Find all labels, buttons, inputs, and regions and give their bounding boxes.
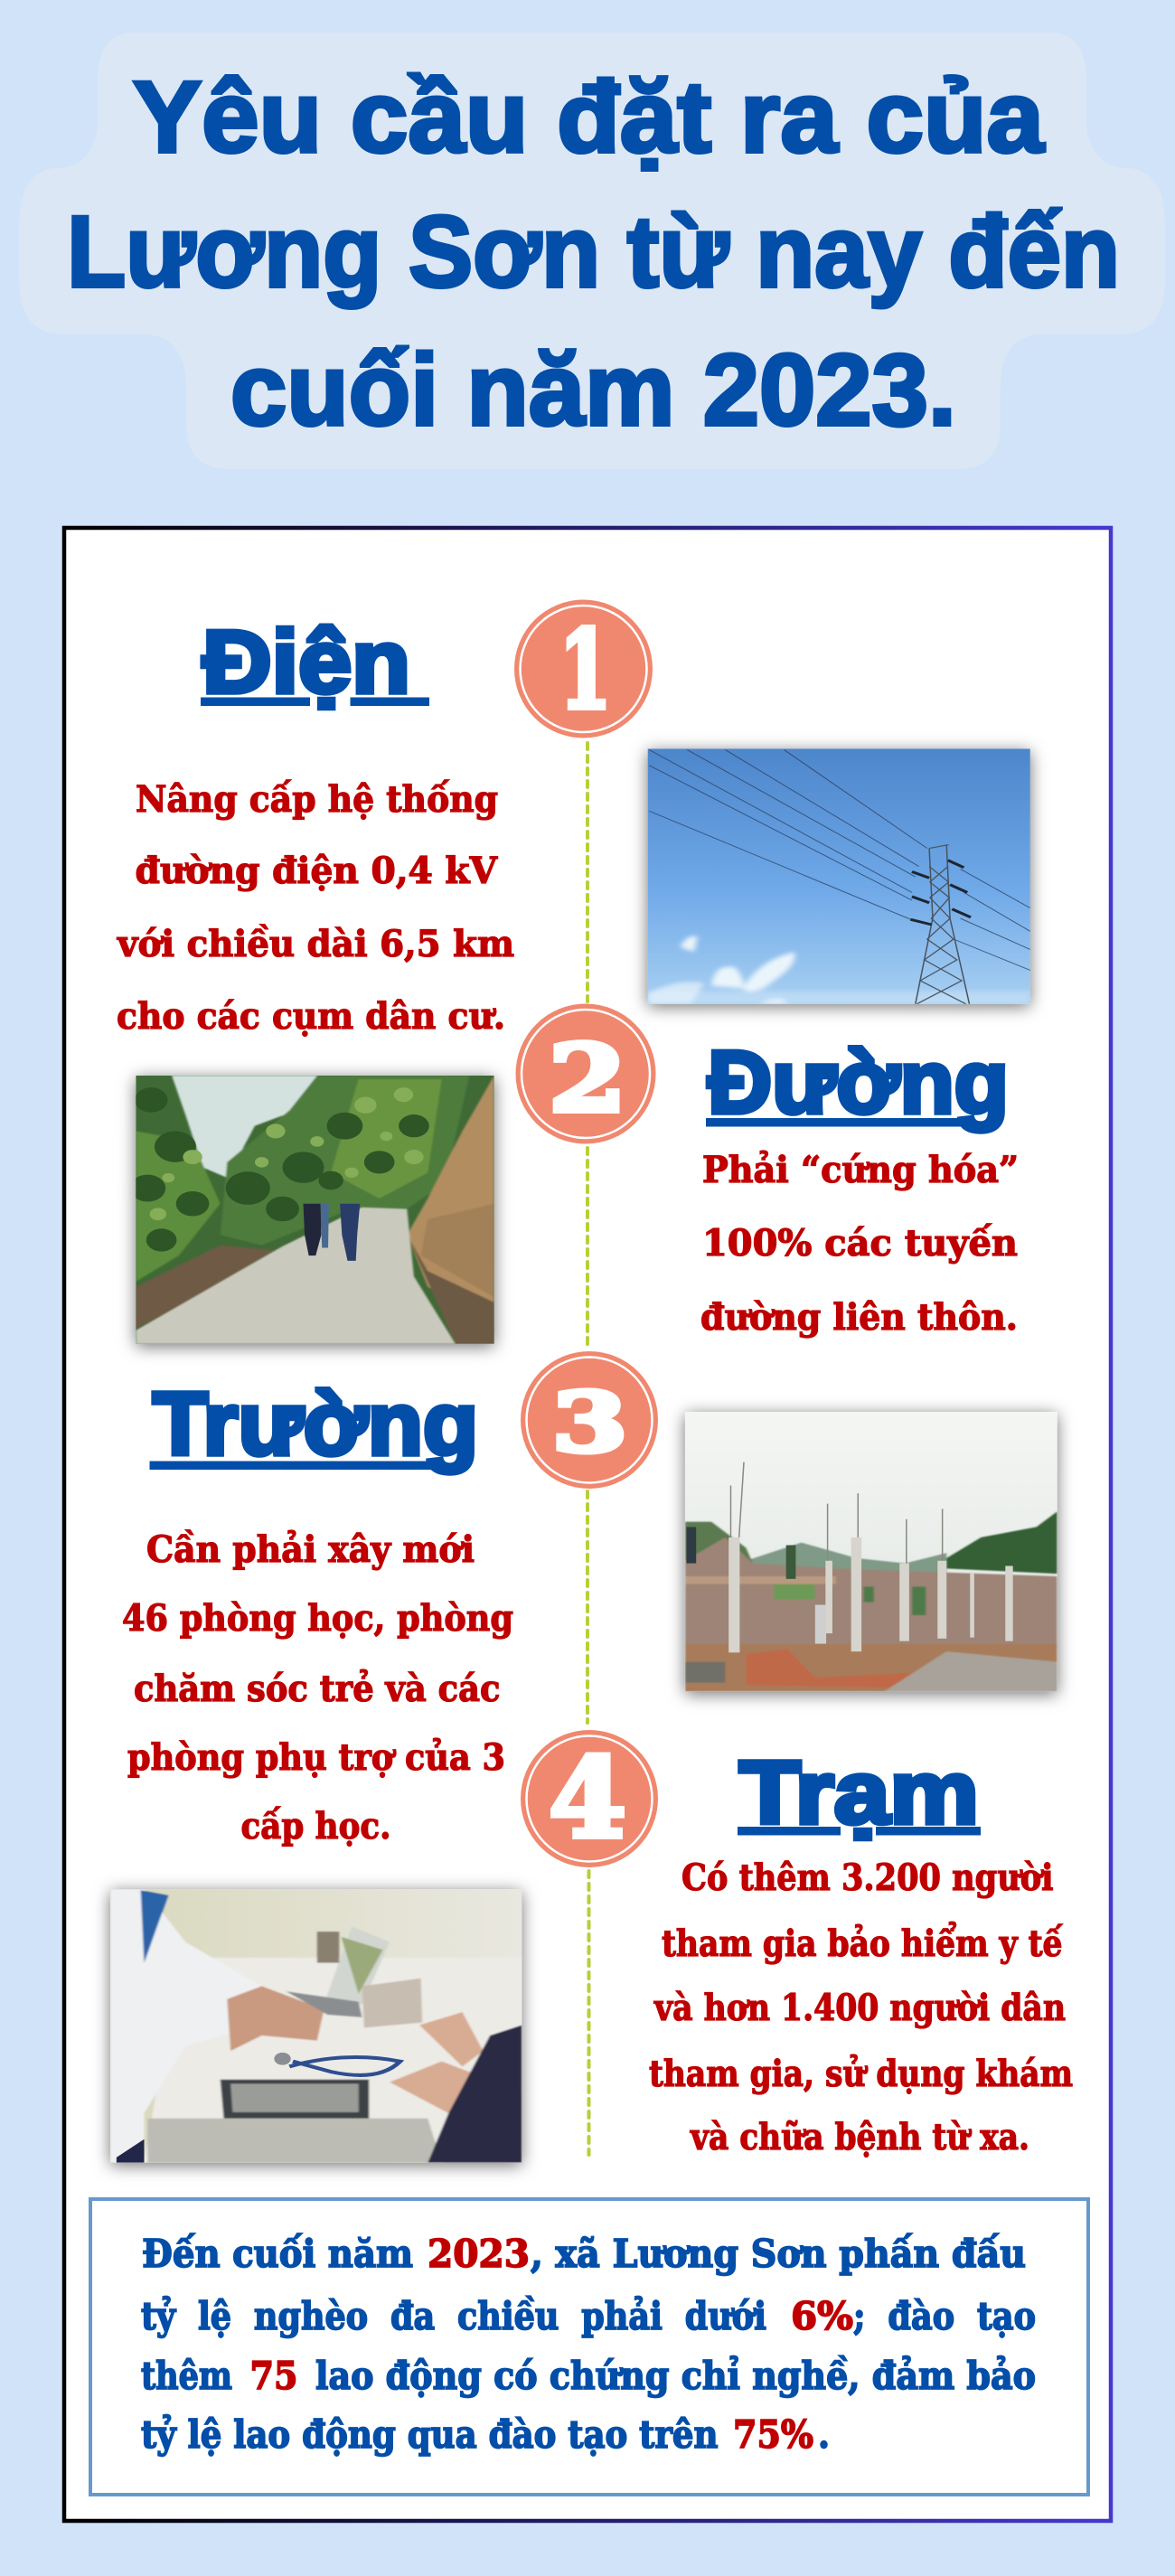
heading: Đường: Đường bbox=[708, 1032, 1009, 1132]
body text: Trạm: và hơn 1.400 người dân bbox=[653, 1987, 1066, 2029]
summary text: 6% bbox=[791, 2294, 853, 2338]
summary text: Đến cuối năm bbox=[142, 2232, 413, 2276]
body text: Điện bbox=[117, 778, 514, 1038]
title text bbox=[67, 61, 1120, 447]
main white panel bbox=[64, 528, 1111, 2521]
heading: Điện: Điện bbox=[202, 612, 410, 711]
body text: Trạm: Có thêm 3.200 người bbox=[682, 1857, 1054, 1899]
section 2: Đường bbox=[129, 1003, 1019, 1344]
number badge 3: 3 bbox=[552, 1375, 627, 1471]
number badge 3 bbox=[521, 1351, 658, 1489]
body text: Điện: với chiều dài 6,5 km bbox=[117, 923, 514, 965]
body text: Trạm: tham gia bảo hiểm y tế bbox=[662, 1923, 1063, 1965]
summary text: , xã Lương Sơn phấn đấu bbox=[531, 2232, 1026, 2276]
section 1: Điện bbox=[117, 600, 1030, 1038]
heading: Trạm: Trạm bbox=[739, 1743, 979, 1842]
tower bbox=[916, 845, 969, 1004]
number badge 2: 2 bbox=[549, 1025, 626, 1133]
number badge 4 bbox=[521, 1730, 658, 1867]
summary text: lao động có chứng chỉ nghề, đảm bảo bbox=[315, 2354, 1036, 2398]
body text: Điện: đường điện 0,4 kV bbox=[136, 850, 498, 892]
body text: Trạm: tham gia, sử dụng khám bbox=[649, 2053, 1073, 2095]
summary text: . bbox=[818, 2412, 830, 2457]
title text: Yêu cầu đặt ra của bbox=[133, 61, 1045, 174]
summary text: tỷ lệ nghèo đa chiều phải dưới bbox=[141, 2294, 766, 2338]
number badge 2 bbox=[515, 1003, 656, 1144]
heading: Trường: Trường bbox=[153, 1374, 478, 1473]
summary text: 75% bbox=[733, 2412, 813, 2457]
summary text: 75 bbox=[249, 2354, 298, 2398]
title backdrop shape bbox=[19, 33, 1165, 469]
body text: Trường: phòng phụ trợ của 3 bbox=[127, 1736, 505, 1779]
section 3: Trường bbox=[122, 1351, 1058, 1847]
body text: Đường: Phải “cứng hóa” bbox=[702, 1149, 1019, 1191]
number badge 1: 1 bbox=[559, 606, 611, 734]
body text: Trạm bbox=[649, 1857, 1073, 2158]
photo: power lines against blue sky bbox=[648, 748, 1030, 1004]
body text: Điện: Nâng cấp hệ thống bbox=[136, 778, 498, 821]
timeline dotted connector bbox=[588, 743, 589, 2155]
body text: Trường: chăm sóc trẻ và các bbox=[134, 1668, 501, 1710]
body text: Trường: Cần phải xây mới bbox=[146, 1528, 475, 1571]
body text: Trường: 46 phòng học, phòng bbox=[122, 1597, 513, 1640]
body text: Đường: 100% các tuyến bbox=[702, 1222, 1018, 1264]
summary text: tỷ lệ lao động qua đào tạo trên bbox=[141, 2412, 718, 2457]
number badge 4: 4 bbox=[549, 1733, 626, 1863]
summary box bbox=[90, 2199, 1088, 2495]
title text: cuối năm 2023. bbox=[230, 334, 956, 447]
section 4: Trạm bbox=[110, 1730, 1073, 2163]
body text: Điện: cho các cụm dân cư. bbox=[117, 995, 505, 1038]
title bbox=[19, 33, 1165, 469]
summary text: 2023 bbox=[428, 2232, 530, 2276]
summary text: thêm bbox=[141, 2354, 232, 2398]
body text: Đường: đường liên thôn. bbox=[700, 1296, 1018, 1339]
body text: Đường bbox=[700, 1149, 1019, 1339]
body text: Trường bbox=[122, 1528, 513, 1847]
summary text bbox=[141, 2232, 1036, 2457]
number badge 1 bbox=[514, 600, 653, 738]
photo: doctor consulting a patient at a desk bbox=[110, 1889, 522, 2163]
photo: school under construction bbox=[685, 1412, 1058, 1691]
summary text: ; đào tạo bbox=[853, 2294, 1036, 2338]
body text: Trạm: và chữa bệnh từ xa. bbox=[690, 2116, 1029, 2158]
body text: Trường: cấp học. bbox=[240, 1805, 390, 1847]
title text: Lương Sơn từ nay đến bbox=[67, 195, 1120, 308]
photo: concrete village road with people bbox=[129, 1076, 494, 1344]
